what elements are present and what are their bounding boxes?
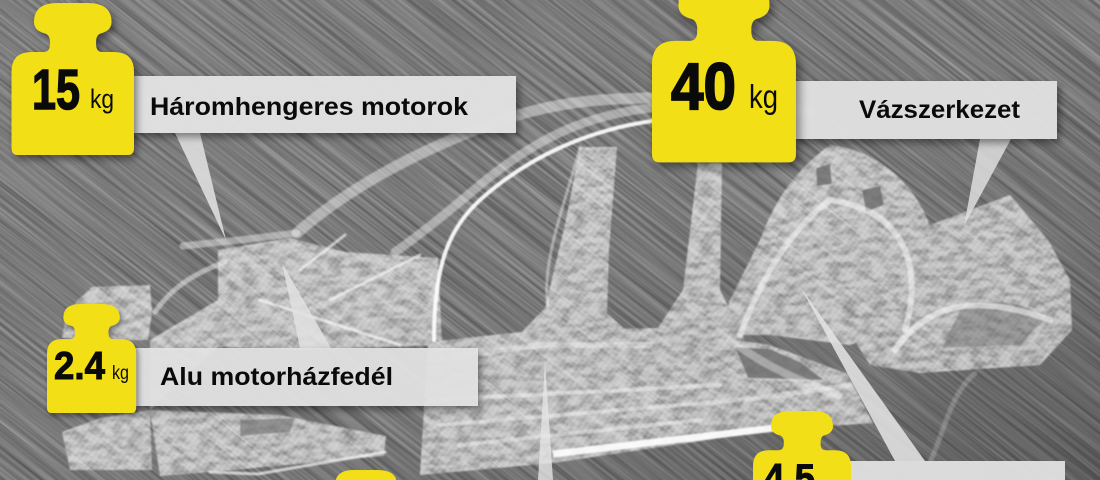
label text: Vázszerkezet [859, 96, 1021, 124]
callout: Háromhengeres motorok [126, 76, 516, 240]
label box [845, 461, 1065, 480]
car: window frame rails and ribs [155, 98, 1050, 474]
weight icon: 40 kg: kg [749, 78, 778, 115]
weight icon: 2.4 kg: kg [112, 363, 129, 384]
car: mottled detail [62, 145, 1072, 476]
callout: Alu motorházfedél [130, 263, 478, 406]
car body X-ray illustration [62, 98, 1072, 476]
weight icon: 4.5 kg, cropped by the frame [753, 411, 851, 480]
weight icon: 2.4 kg [47, 304, 136, 413]
label box [790, 81, 1057, 139]
pointer [175, 133, 226, 240]
label box [126, 76, 516, 133]
car: structural panels [62, 145, 1072, 476]
pointer [964, 139, 1011, 226]
callout: Vázszerkezet [790, 81, 1057, 226]
weight icon: 40 kg: 40 [671, 49, 736, 123]
label box [130, 348, 478, 406]
pointer: central floor callout [538, 362, 553, 480]
weight icon: bottom centre, cropped by the frame [336, 470, 396, 480]
pointer [282, 263, 331, 348]
weight icon: 15 kg: 15 [32, 58, 80, 122]
weight icon: 40 kg [652, 0, 796, 162]
callout: lower right label, text cropped by the frame [801, 288, 1065, 480]
car: dark openings [240, 164, 1044, 436]
weight icon: 15 kg [12, 3, 134, 155]
weight icon: 15 kg: kg [90, 84, 114, 114]
pointer [801, 288, 925, 461]
weight icon: 2.4 kg: 2.4 [54, 345, 105, 388]
label text: Háromhengeres motorok [150, 93, 468, 121]
label text: Alu motorházfedél [160, 363, 393, 391]
